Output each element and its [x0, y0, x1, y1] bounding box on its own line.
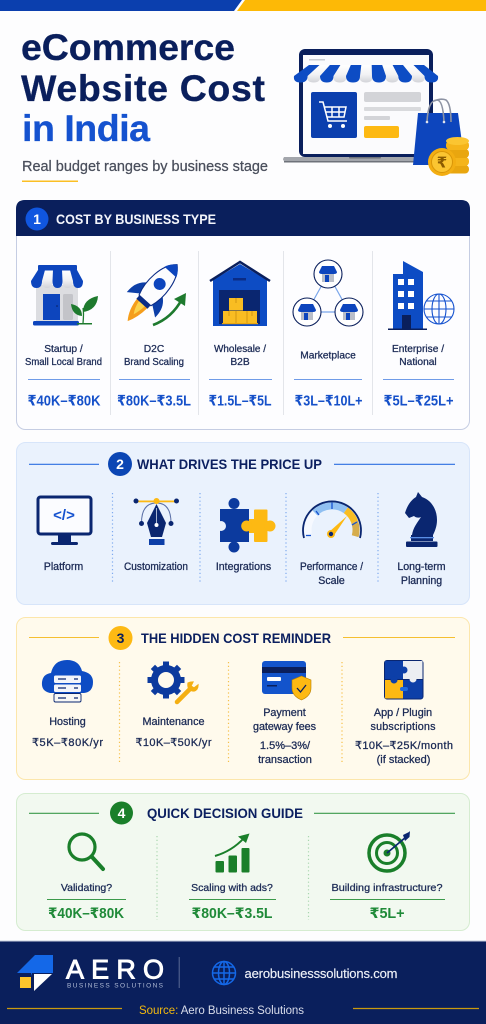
business type labels: D2C: [144, 344, 164, 355]
icon: cloud hosting: [42, 660, 93, 702]
icon: code monitor: </>: [53, 507, 75, 524]
icon: gear and wrench: [148, 662, 198, 702]
icon: card with shield: [262, 661, 311, 700]
price ranges: ₹5L–₹25L+: [384, 394, 454, 410]
subtitle underline: [22, 180, 78, 182]
business type labels: Wholesale /: [214, 344, 266, 355]
title: [21, 26, 266, 149]
price ranges: ₹3L–₹10L+: [294, 394, 362, 410]
icon: chess knight: [405, 492, 438, 547]
subtitle: Real budget ranges by business stage: [22, 159, 268, 175]
section heading: THE HIDDEN COST REMINDER: [141, 631, 331, 646]
hidden cost items: Payment: [263, 707, 306, 719]
icon: globe: [212, 962, 236, 984]
icon: marketplace network: [293, 260, 363, 326]
business type labels: National: [399, 357, 437, 368]
wordmark: BUSINESS SOLUTIONS: [67, 982, 164, 990]
hidden cost items: [32, 707, 453, 766]
panel header: COST BY BUSINESS TYPE: [56, 212, 216, 227]
icon: growth bars: [215, 834, 250, 872]
price ranges: ₹40K–₹80K: [28, 394, 101, 410]
hidden cost items: Hosting: [49, 716, 86, 728]
icon: magnifier: [69, 834, 103, 869]
decision labels: [61, 882, 443, 894]
hidden cost items: App / Plugin: [374, 707, 432, 719]
hidden cost items: ₹5K–₹80K/yr: [32, 737, 103, 749]
business type labels: B2B: [230, 357, 250, 368]
hidden cost items: 1.5%–3%/: [260, 740, 311, 752]
panel: hidden cost reminder: [16, 618, 470, 780]
title: in India: [22, 107, 151, 149]
icon: office tower and globe: [388, 261, 454, 330]
section heading: [29, 802, 455, 824]
hidden cost items: gateway fees: [253, 721, 317, 733]
section heading: [29, 626, 455, 650]
icon: puzzle pieces: [216, 498, 276, 552]
decision prices: [48, 906, 404, 922]
driver labels: Planning: [401, 575, 442, 587]
business type labels: Small Local Brand: [25, 357, 102, 368]
panel: cost by business type: [16, 200, 470, 430]
price ranges: ₹80K–₹3.5L: [117, 394, 191, 410]
title: eCommerce: [21, 26, 235, 68]
section heading: 3: [117, 630, 125, 646]
logo mark: [17, 955, 53, 991]
hidden cost items: Maintenance: [142, 716, 204, 728]
price ranges: ₹1.5L–₹5L: [208, 394, 272, 410]
driver labels: Scale: [318, 575, 345, 587]
panel: quick decision guide: [16, 794, 470, 930]
hidden cost items: transaction: [258, 754, 312, 766]
icon: pen tool: [134, 498, 179, 545]
business type labels: Startup /: [44, 344, 83, 355]
top accent bar: [0, 0, 486, 11]
icon: target with arrow: [369, 831, 410, 871]
hidden cost items: subscriptions: [370, 721, 436, 733]
icon: rocket with growth arrow: [113, 252, 191, 333]
icon: speed gauge: [303, 501, 361, 538]
footer: [0, 940, 486, 1024]
icon: code monitor: [38, 497, 91, 545]
driver labels: Platform: [44, 561, 83, 573]
business type labels: Brand Scaling: [124, 357, 184, 368]
section heading: WHAT DRIVES THE PRICE UP: [137, 457, 322, 472]
icon: laptop storefront with bag and coins: [283, 49, 469, 176]
decision prices: ₹40K–₹80K: [48, 906, 125, 922]
decision labels: Scaling with ads?: [191, 882, 273, 894]
driver labels: Long-term: [397, 561, 446, 573]
source line: Source: Aero Business Solutions: [139, 1005, 304, 1017]
panel header: 1: [33, 211, 41, 227]
decision prices: ₹5L+: [370, 906, 404, 922]
decision labels: Validating?: [61, 882, 112, 894]
driver labels: Integrations: [216, 561, 271, 573]
panel header: [16, 200, 470, 236]
icon: local store with plant: [31, 265, 98, 326]
website: aerobusinesssolutions.com: [244, 966, 398, 981]
business type labels: [25, 344, 444, 368]
icon: laptop storefront with bag and coins: ₹: [437, 154, 447, 172]
business type labels: Enterprise /: [392, 344, 444, 355]
title: Website Cost: [21, 67, 266, 109]
wordmark: AERO: [66, 954, 164, 984]
driver labels: Performance /: [300, 561, 363, 573]
hidden cost items: ₹10K–₹25K/month: [355, 740, 453, 752]
hidden cost items: (if stacked): [377, 754, 430, 766]
price ranges: [28, 394, 454, 410]
decision prices: ₹80K–₹3.5L: [192, 906, 273, 922]
panel: what drives the price up: [16, 442, 470, 604]
driver labels: Customization: [124, 561, 188, 573]
icon: warehouse with boxes: [210, 262, 270, 326]
section heading: 4: [118, 805, 126, 821]
hidden cost items: ₹10K–₹50K/yr: [136, 737, 212, 749]
decision labels: Building infrastructure?: [332, 882, 443, 894]
icon: plugin puzzle tile: [384, 660, 424, 700]
section heading: QUICK DECISION GUIDE: [147, 806, 303, 821]
section heading: 2: [116, 456, 124, 472]
driver labels: [44, 561, 446, 587]
business type labels: Marketplace: [300, 350, 356, 362]
section heading: [29, 452, 455, 476]
